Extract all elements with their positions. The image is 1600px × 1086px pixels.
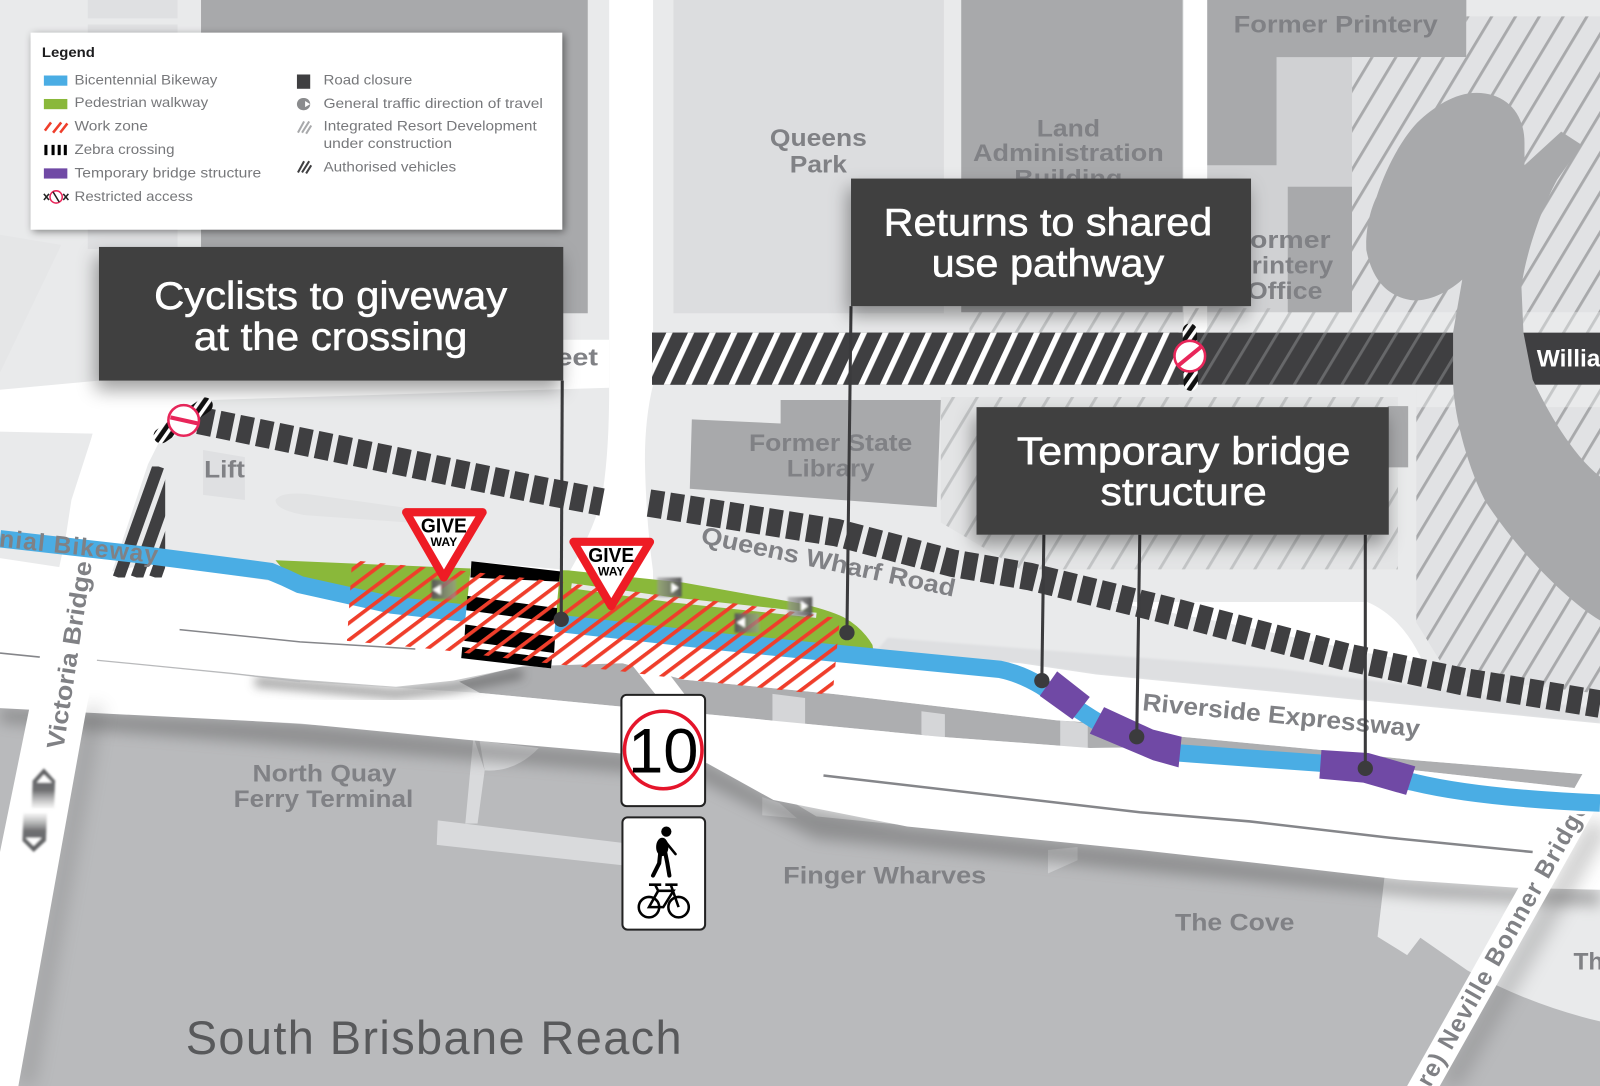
building and place labels: The Cove: [1175, 910, 1294, 937]
give way sign left: WAY: [431, 535, 457, 549]
building and place labels: Office: [1247, 278, 1322, 305]
hatched Integrated Resort Development areas: [941, 16, 1600, 694]
finger wharf stubs: [762, 797, 1078, 873]
road name labels on map: Queens Wharf Road: [699, 522, 958, 603]
building and place labels: Library: [787, 456, 875, 483]
Victoria Bridge traffic arrows: [22, 768, 55, 852]
road shadow: [0, 708, 1600, 906]
legend: integrated resort development: [298, 119, 537, 152]
Queens Wharf north-south road: [551, 0, 719, 740]
water label: South Brisbane Reach: [186, 1012, 682, 1064]
south-east parkland: [1378, 876, 1600, 1021]
work zone hatching: [347, 560, 840, 695]
Lift area: Lift: [204, 457, 245, 484]
Victoria Bridge shadow: [18, 707, 102, 1086]
building and place labels: Former Printery: [1234, 12, 1438, 39]
road dividing lines: [0, 630, 1533, 852]
Riverside Expressway lower carriageways: [0, 653, 1600, 890]
purple temporary bridge structures: [1040, 671, 1415, 795]
callout: cyclists give way: Cyclists to giveway: [154, 275, 508, 318]
building and place labels: Queens: [770, 125, 867, 152]
legend: road closure: Road closure: [323, 73, 412, 89]
building and place labels: Building: [1014, 166, 1122, 193]
legend: restricted access: Restricted access: [74, 189, 193, 205]
direction of travel arrows: [432, 578, 812, 633]
Former State Library building: [690, 400, 941, 507]
Victoria Bridge road: [0, 433, 151, 1086]
William Street label: Willia: [1537, 345, 1600, 372]
building and place labels: Printery: [1234, 252, 1334, 279]
building and place labels: Finger Wharves: [783, 863, 986, 890]
expressway underpass gap: [459, 663, 1600, 791]
icon: pedestrian: [653, 827, 676, 876]
building and place labels: Park: [790, 151, 847, 178]
give way sign right: [573, 542, 650, 606]
road name labels on map: Riverside Expressway: [1141, 689, 1422, 743]
speed limit 10 sign: 10: [628, 716, 698, 786]
zebra road: Queens Wharf Road west: [199, 420, 602, 502]
callout: temporary bridge structure: Temporary bridge: [1017, 430, 1351, 473]
road name labels on map: [43, 522, 1422, 751]
give way sign left: [406, 512, 483, 578]
shaded verge above expressway: [874, 638, 1600, 723]
give way sign right: WAY: [598, 565, 625, 579]
give way sign left: GIVE: [421, 516, 467, 538]
callout: temporary bridge structure: [977, 407, 1389, 535]
callout: cyclists give way: [99, 247, 563, 381]
legend: temporary bridge: Temporary bridge structure: [74, 166, 261, 182]
legend: work zone: [45, 119, 148, 135]
callout: cyclists give way: at the crossing: [194, 316, 467, 359]
restricted access sign east: [1174, 331, 1205, 384]
legend: bikeway: Bicentennial Bikeway: [74, 73, 218, 89]
legend: work zone: Work zone: [74, 119, 148, 135]
callout: returns to shared use pathway: use pathway: [932, 243, 1165, 286]
Neville Bonner Bridge road: [1407, 743, 1600, 1086]
pale path line within walkway: [571, 586, 816, 615]
speed limit 10 sign: [621, 695, 705, 806]
legend: integrated resort development: Integrated Resort Development: [323, 119, 537, 135]
callout: returns to shared use pathway: Returns to shared: [884, 202, 1212, 245]
road name labels on map: Victoria Bridge: [43, 559, 98, 751]
Riverside Expressway upper carriageway: [0, 558, 1600, 776]
restricted access sign west: [161, 405, 205, 436]
legend: zebra crossing: Zebra crossing: [74, 142, 175, 158]
south river water: [0, 704, 1600, 1086]
blue Bicentennial Bikeway: [0, 539, 1600, 803]
closed William Street: [652, 333, 1600, 385]
Neville Bonner Bridge label: re) Neville Bonner Bridge: [1412, 796, 1595, 1086]
zebra crossing beside lift: [113, 466, 166, 578]
building and place labels: Administration: [973, 140, 1164, 167]
callout: returns to shared use pathway: [851, 179, 1251, 306]
zebra road: Queens Wharf Road east: [649, 503, 1600, 704]
Lift area: [203, 450, 418, 522]
green pedestrian walkway: [276, 560, 874, 657]
legend: integrated resort development: under construction: [323, 136, 452, 152]
legend panel: [31, 33, 562, 230]
ferry terminal pontoon: [437, 737, 622, 865]
Integrated resort tower shape: [1366, 93, 1600, 620]
legend: traffic direction: General traffic direction of travel: [323, 96, 543, 112]
zebra crossing black bars: [461, 561, 560, 668]
legend: walkway: Pedestrian walkway: [74, 95, 209, 111]
building and place labels: Ferry Terminal: [234, 786, 413, 813]
give way sign right: GIVE: [588, 545, 634, 567]
shared path sign: [622, 817, 705, 930]
legend: authorised vehicles: Authorised vehicles: [323, 159, 456, 175]
north-west road and approach: [0, 340, 609, 571]
building and place labels: North Quay: [253, 761, 397, 788]
legend title: Legend: [42, 45, 95, 60]
building and place labels: Former State: [749, 430, 912, 457]
building and place labels: Street: [516, 344, 598, 371]
icon: bicycle: [639, 884, 689, 917]
leader lines and dots: [554, 306, 1373, 776]
Bikeway label over blue: nial Bikeway: [0, 526, 160, 569]
Neville Bonner Bridge shadow: [1440, 816, 1600, 1086]
building and place labels: [234, 12, 1600, 975]
callout: temporary bridge structure: structure: [1101, 471, 1267, 514]
upper city blocks: [0, 0, 1466, 372]
white road east of crossing: [1112, 602, 1423, 663]
building and place labels: Land: [1037, 116, 1100, 143]
shadow beneath upper carriageway curve: [255, 673, 522, 694]
building and place labels: Former: [1233, 227, 1331, 254]
